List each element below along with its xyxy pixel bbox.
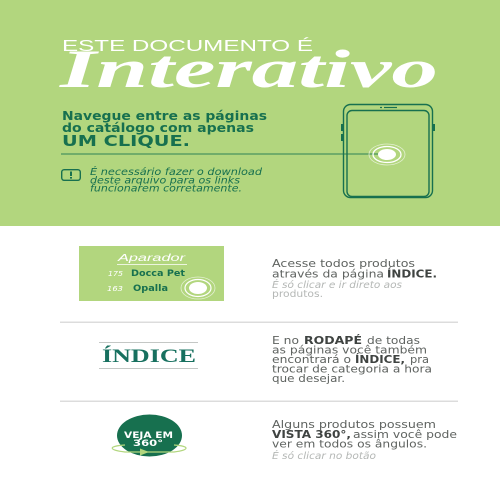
text: download warning (90, 166, 263, 194)
icon: tap point (369, 144, 405, 165)
heading: este documento é: ESTE DOCUMENTO É (62, 38, 313, 55)
button: veja em 360: 360° (133, 439, 163, 449)
logo: índice: ÍNDICE (102, 345, 196, 367)
list item: opalla: 163 (107, 285, 123, 293)
text: footer index (272, 334, 432, 385)
orbit ring (112, 445, 186, 452)
text: access products: ÍNDICE. (387, 268, 437, 280)
text: footer index: de todas (367, 334, 420, 347)
heading: interativo: Interativo (58, 39, 438, 99)
text: footer index: RODAPÉ (304, 334, 362, 347)
text: download warning: deste arquivo para os links (90, 176, 240, 186)
text: access products (272, 257, 437, 300)
text: 360 view: assim você pode (353, 428, 457, 441)
text: access products: produtos. (272, 289, 323, 300)
icon: phone (342, 104, 434, 198)
list item: opalla (107, 284, 168, 294)
text: access products: através da página (272, 268, 384, 280)
text: 360 view (272, 418, 457, 462)
logo: índice (99, 342, 198, 368)
icon: warning (62, 170, 80, 180)
list item: opalla: Opalla (133, 284, 168, 294)
list item: docca pet (108, 269, 185, 279)
button: veja em 360: VEJA EM (124, 431, 173, 441)
button: veja em 360 (112, 414, 186, 456)
panel: index example (79, 246, 224, 301)
connector line to tap point (61, 153, 378, 155)
text: access products: Acesse todos produtos (272, 257, 415, 270)
text: download warning: funcionarem corretamente. (90, 184, 242, 194)
text: footer index: que desejar. (272, 372, 345, 385)
text: footer index: as páginas você também (272, 344, 427, 356)
text: footer index: E no (272, 334, 299, 347)
text: access products: É só clicar e ir direto aos (272, 278, 402, 291)
text: footer index: ÍNDICE, (355, 353, 405, 366)
label: aparador: Aparador (116, 253, 186, 264)
list item: docca pet: 175 (108, 270, 124, 278)
icon: tap point (181, 277, 215, 299)
text: navigation instruction: do catálogo com apenas (62, 120, 254, 135)
panel: green header (0, 0, 500, 226)
text: footer index: encontrará o (272, 353, 351, 366)
text: 360 view: É só clicar no botão (272, 449, 376, 462)
list item: docca pet: Docca Pet (131, 269, 185, 279)
text: navigation instruction: Navegue entre as páginas (62, 108, 267, 123)
text: 360 view: Alguns produtos possuem (272, 418, 436, 431)
text: download warning: É necessário fazer o download (90, 166, 263, 178)
text: footer index: pra (410, 353, 429, 366)
text: navigation instruction: UM CLIQUE. (62, 132, 190, 150)
play arrow (140, 448, 149, 456)
text: 360 view: ver em todos os ângulos. (272, 438, 427, 450)
text: navigation instruction (62, 108, 267, 150)
text: footer index: trocar de categoria a hora (272, 362, 432, 376)
text: 360 view: VISTA 360°, (272, 428, 351, 441)
